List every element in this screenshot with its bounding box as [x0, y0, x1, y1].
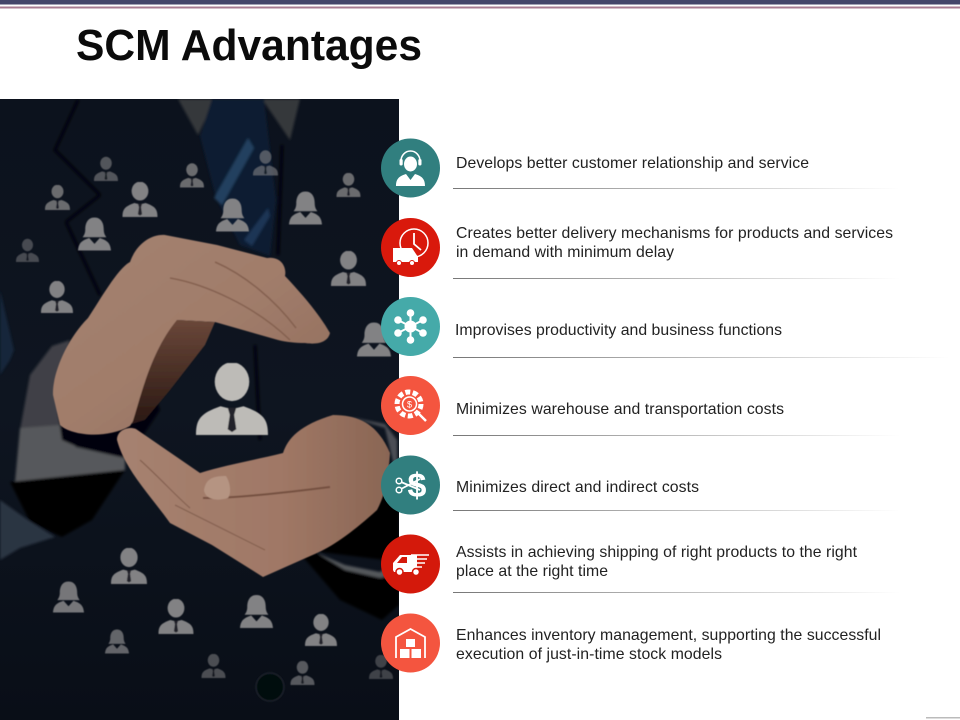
text: Develops better customer relationship and service — [456, 155, 809, 172]
lower hand — [117, 415, 390, 577]
text: Creates better delivery mechanisms for products and services — [456, 225, 893, 242]
people icons — [16, 150, 393, 685]
text: in demand with minimum delay — [456, 244, 674, 261]
title: SCM Advantages — [76, 21, 422, 70]
text: Minimizes direct and indirect costs — [456, 479, 699, 496]
suit button — [256, 673, 284, 701]
top header bars — [0, 0, 960, 8]
suit, shirt and sleeves — [0, 99, 399, 620]
icon: gear with magnifier — [381, 376, 440, 435]
item 6: shipping — [381, 534, 900, 594]
icon: gear with magnifier: $ — [407, 400, 412, 410]
icon: customer service agent — [381, 138, 440, 198]
text: Assists in achieving shipping of right products to the right — [456, 544, 858, 561]
footer mark — [926, 717, 960, 718]
item 3: productivity — [381, 297, 950, 358]
icon: scissors cutting dollar — [381, 456, 440, 514]
text — [456, 627, 881, 663]
item 5: direct and indirect costs — [381, 456, 900, 514]
upper hand — [53, 235, 330, 435]
text: execution of just-in-time stock models — [456, 646, 722, 663]
item 2: delivery mechanisms — [381, 218, 900, 279]
text: Minimizes warehouse and transportation costs — [456, 401, 784, 418]
text: Improvises productivity and business functions — [455, 322, 782, 339]
item 1: customer relationship — [381, 138, 900, 198]
item 4: warehouse and transportation costs — [381, 376, 900, 436]
item 7: inventory management — [381, 614, 881, 672]
icon: warehouse with boxes — [381, 614, 440, 672]
text — [456, 544, 858, 580]
text: place at the right time — [456, 563, 608, 580]
photo: hands protecting people icons over a dark suit — [0, 99, 399, 720]
text: Enhances inventory management, supporting the successful — [456, 627, 881, 644]
icon: scissors cutting dollar: $ — [408, 467, 427, 505]
text — [456, 225, 893, 261]
icon: fast delivery van — [381, 534, 440, 594]
icon: truck and clock — [381, 218, 440, 277]
icon: network hub — [381, 297, 440, 356]
